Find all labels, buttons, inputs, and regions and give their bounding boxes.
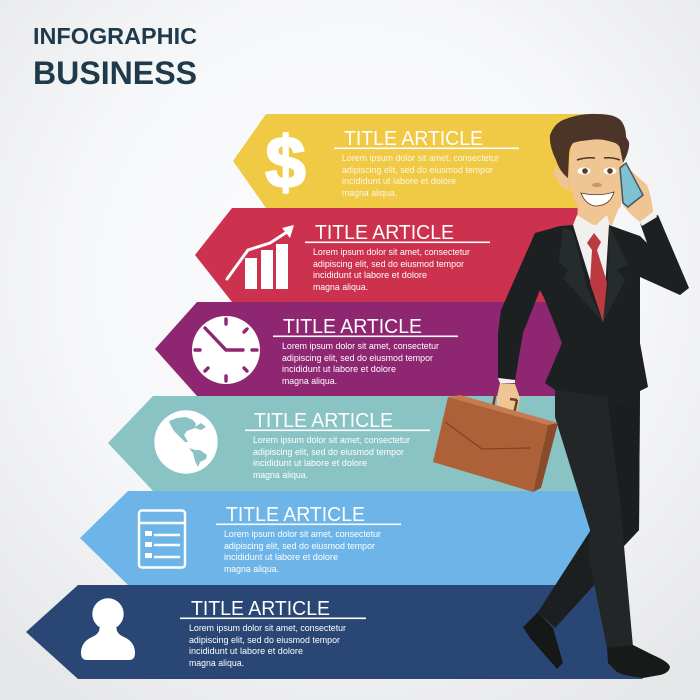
icon: growth chart — [227, 225, 294, 289]
cuff at phone hand — [640, 214, 657, 226]
text block: yellow article: adipiscing elit, sed do eiusmod tempor — [342, 165, 493, 175]
panel: navy arrow people — [26, 585, 643, 679]
icon: document list — [139, 510, 185, 568]
left cuff and hand — [497, 378, 520, 413]
title: BUSINESS — [33, 55, 197, 91]
text block: teal article — [253, 435, 410, 480]
text block: yellow article: incididunt ut labore et dolore — [342, 176, 456, 186]
panel: purple arrow time — [155, 302, 575, 396]
rear leg and shoe — [523, 528, 596, 669]
text block: blue article: Lorem ipsum dolor sit amet, consectetur — [224, 529, 381, 539]
heading: teal article: TITLE ARTICLE — [254, 410, 393, 432]
title — [33, 23, 197, 91]
text block: yellow article: Lorem ipsum dolor sit amet, consectetur — [342, 153, 499, 163]
neck and ear — [554, 166, 622, 225]
text block: blue article: incididunt ut labore et dolore — [224, 552, 338, 562]
icon: globe — [154, 410, 218, 474]
text block: navy article: adipiscing elit, sed do eiusmod tempor — [189, 635, 340, 645]
panel: blue arrow document — [80, 491, 590, 585]
smile — [581, 192, 614, 206]
text block: purple article: incididunt ut labore et dolore — [282, 364, 396, 374]
text block: red article: Lorem ipsum dolor sit amet, consectetur — [313, 247, 470, 257]
suit jacket — [498, 215, 689, 407]
icon: clock — [192, 316, 260, 384]
text block: purple article: Lorem ipsum dolor sit amet, consectetur — [282, 341, 439, 351]
heading: yellow article: TITLE ARTICLE — [344, 128, 483, 150]
text block: yellow article: magna aliqua. — [342, 188, 397, 198]
text block: navy article: magna aliqua. — [189, 658, 244, 668]
text block: teal article: adipiscing elit, sed do eiusmod tempor — [253, 447, 404, 457]
heading: blue article: TITLE ARTICLE — [226, 504, 365, 526]
panel: teal arrow global — [108, 396, 585, 491]
text block: blue article — [224, 529, 381, 574]
text block: purple article: magna aliqua. — [282, 376, 337, 386]
panel: yellow arrow finance — [233, 114, 585, 208]
text block: teal article: magna aliqua. — [253, 470, 308, 480]
front leg and shoe — [555, 385, 670, 678]
text block: teal article: incididunt ut labore et dolore — [253, 458, 367, 468]
text block: red article: incididunt ut labore et dolore — [313, 270, 427, 280]
text block: purple article: adipiscing elit, sed do eiusmod tempor — [282, 353, 433, 363]
heading: navy article: TITLE ARTICLE — [191, 598, 330, 620]
text block: blue article: adipiscing elit, sed do eiusmod tempor — [224, 541, 375, 551]
shirt — [573, 215, 610, 322]
text block: purple article — [282, 341, 439, 386]
tie — [587, 233, 607, 322]
lapels — [559, 225, 628, 322]
phone hand — [623, 168, 653, 222]
text block: teal article: Lorem ipsum dolor sit amet, consectetur — [253, 435, 410, 445]
text block: yellow article — [342, 153, 499, 198]
face — [568, 138, 625, 217]
title: INFOGRAPHIC — [33, 23, 197, 49]
text block: red article: adipiscing elit, sed do eiusmod tempor — [313, 259, 464, 269]
text block: red article — [313, 247, 470, 292]
icon: dollar sign: $ — [266, 123, 306, 203]
hair — [550, 114, 629, 178]
heading: red article: TITLE ARTICLE — [315, 222, 454, 244]
eyes — [577, 158, 620, 175]
icon: person — [81, 598, 135, 660]
text block: red article: magna aliqua. — [313, 282, 368, 292]
phone — [620, 163, 643, 207]
text block: navy article: incididunt ut labore et dolore — [189, 646, 303, 656]
text block: navy article: Lorem ipsum dolor sit amet, consectetur — [189, 623, 346, 633]
panel: red arrow growth — [195, 208, 585, 302]
nose — [592, 183, 602, 187]
heading: purple article: TITLE ARTICLE — [283, 316, 422, 338]
text block: navy article — [189, 623, 346, 668]
text block: blue article: magna aliqua. — [224, 564, 279, 574]
businessman illustration — [433, 114, 689, 678]
briefcase — [433, 395, 558, 492]
